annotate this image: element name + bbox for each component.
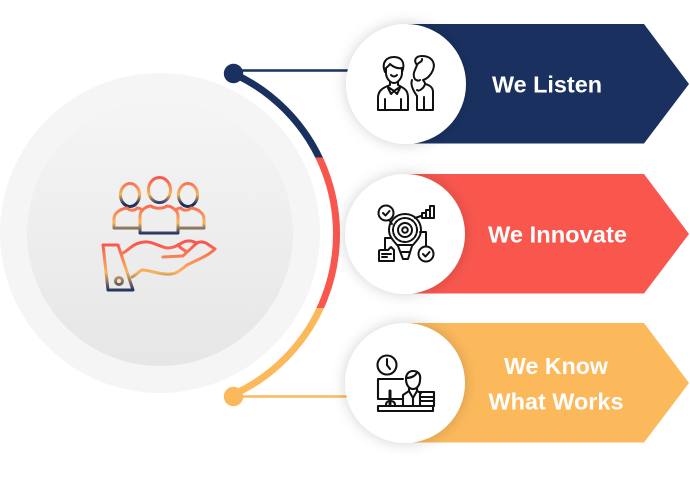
label: We Know What Works: What Works xyxy=(488,388,624,414)
connector arc xyxy=(238,74,340,394)
icon: light bulb with gear xyxy=(378,206,434,262)
label: We Know What Works: We Know xyxy=(504,353,609,379)
badge: listen xyxy=(346,24,466,144)
outer circle xyxy=(0,73,320,393)
icon: two people xyxy=(378,56,434,110)
connector: We Know What Works xyxy=(224,387,350,406)
icon: person at desk with clock xyxy=(378,356,434,411)
inner circle xyxy=(27,100,293,366)
label: We Know What Works xyxy=(488,353,624,414)
banner: We Know What Works xyxy=(405,323,689,442)
badge: innovate xyxy=(345,174,465,294)
badge: know what works xyxy=(345,323,465,443)
banner: We Innovate xyxy=(405,174,689,294)
connector: We Listen xyxy=(224,64,350,83)
banner: We Listen xyxy=(405,24,689,144)
icon: people in hand xyxy=(103,178,215,290)
label: We Listen: We Listen xyxy=(492,72,602,98)
label: We Innovate: We Innovate xyxy=(488,222,627,248)
